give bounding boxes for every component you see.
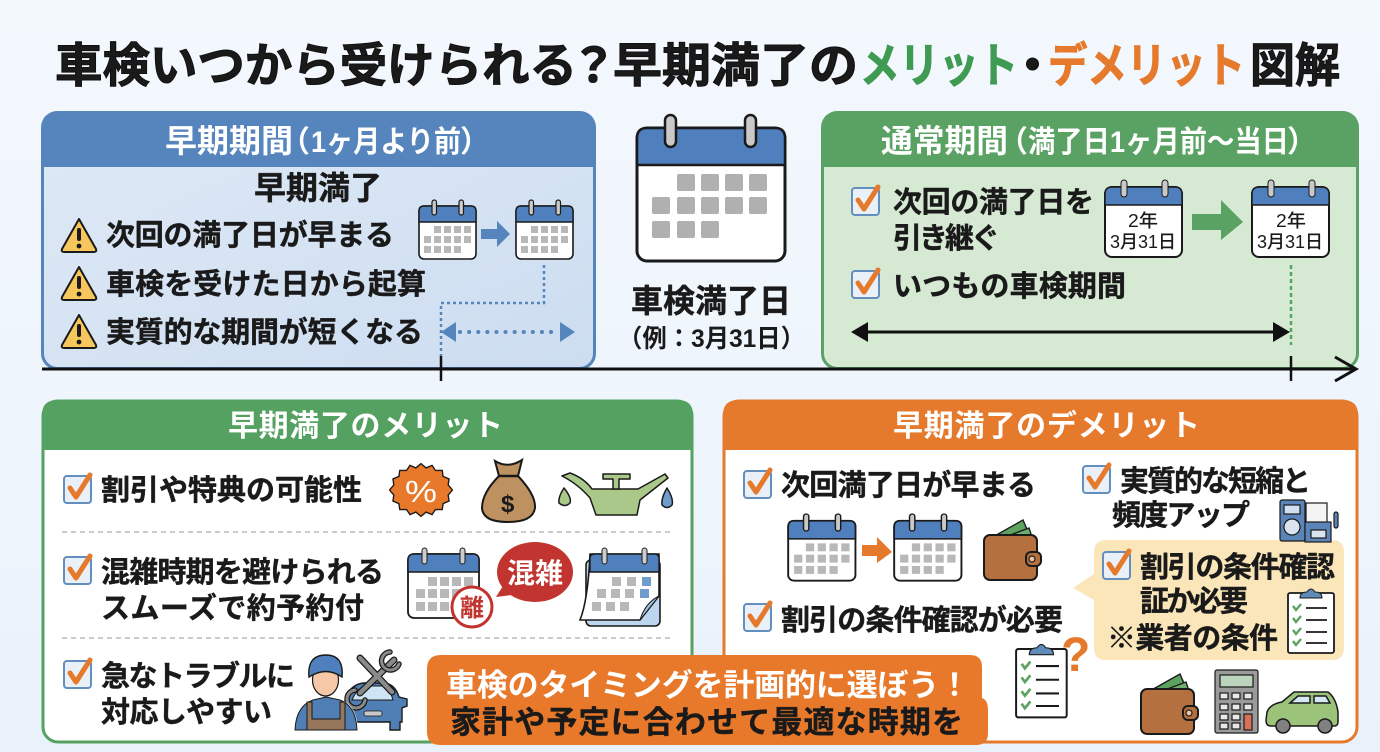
icon: calendar before (419, 200, 476, 259)
checkbox (1083, 465, 1110, 493)
arrow: green (1192, 200, 1243, 240)
dotted connector (441, 265, 544, 356)
callout text: ※業者の条件 (1107, 622, 1278, 655)
icon: main calendar (637, 115, 785, 261)
icon: calendar after (894, 514, 961, 581)
timeline axis (42, 356, 1356, 381)
callout: bottom message: 車検のタイミングを計画的に選ぼう！ (446, 668, 970, 703)
divider (62, 531, 674, 533)
icon: percent badge: % (405, 474, 437, 509)
icon: crowded bubble: 混雑 (507, 558, 563, 589)
icon: calendar with stamp (408, 548, 492, 627)
text: shortening and frequency: 実質的な短縮と (1120, 465, 1311, 498)
checkbox (64, 660, 91, 688)
icon: peeled calendar (580, 548, 660, 626)
title: メリット (860, 39, 1018, 92)
icon: crowded bubble (496, 542, 573, 602)
icon: calendar 3/31 right: 2年 (1276, 211, 1306, 231)
checkbox (744, 470, 771, 498)
text: discounts: 割引や特典の可能性 (101, 474, 362, 507)
heading: normal period: 通常期間 (881, 123, 1008, 159)
heading: early period: 1ヶ月より前 (311, 126, 461, 159)
callout text (1107, 551, 1335, 655)
heading: early period (165, 123, 490, 159)
panel: merits (42, 400, 693, 742)
icon: warning 3 (62, 315, 96, 348)
text: shortening and frequency (1112, 465, 1311, 532)
checkbox (1103, 551, 1130, 579)
text: shortening and frequency: 頻度アップ (1112, 499, 1250, 532)
icon: clipboard with question: ? (1061, 629, 1090, 682)
title: 早期満了の (613, 39, 858, 92)
checkbox 2 (852, 270, 879, 298)
text: inherit expiry date: 引き継ぐ (893, 222, 1000, 255)
text: avoid busy season: スムーズで約予約付 (101, 591, 364, 625)
arrow: shortened span (441, 322, 575, 342)
icon: wallet (984, 520, 1041, 580)
icon: calculator (1215, 670, 1258, 733)
heading: early period: （ (280, 126, 310, 159)
heading: normal period: （ (998, 126, 1028, 159)
checkbox (744, 603, 771, 631)
callout: conditions (1073, 540, 1344, 660)
panel: normal period (822, 112, 1358, 368)
icon: calendar 3/31 left: 2年 (1128, 211, 1158, 231)
title: 車検いつから受けられる (55, 39, 577, 92)
title: デメリット (1048, 39, 1245, 92)
heading: normal period: 満了日1ヶ月前～当日 (1028, 126, 1289, 159)
text: trouble response: 急なトラブルに (101, 659, 295, 693)
callout text: 証か必要 (1140, 585, 1248, 618)
panel: early period (42, 112, 595, 368)
heading: normal period: ） (1287, 126, 1317, 159)
icon: green car (1266, 692, 1338, 733)
icon: percent badge (390, 464, 452, 516)
checkbox 1 (852, 187, 879, 215)
icon: calendar 3/31 left: 3月31日 (1110, 232, 1176, 252)
icon: calendar before (788, 514, 855, 581)
arrow: normal span (851, 322, 1290, 342)
callout text: 割引の条件確認 (1140, 551, 1335, 584)
icon: calendar 3/31 left (1105, 180, 1182, 257)
text: inherit expiry date: 次回の満了日を (893, 186, 1094, 219)
icon: clipboard (1288, 589, 1334, 653)
divider (62, 637, 674, 639)
text: usual period: いつもの車検期間 (893, 270, 1126, 303)
text: trouble response: 対応しやすい (101, 696, 272, 729)
icon: diagnostic machine (1280, 500, 1338, 542)
heading: normal period (881, 123, 1317, 159)
icon: money bag (482, 460, 535, 522)
heading: demerits: 早期満了のデメリット (893, 409, 1200, 443)
callout: bottom message: 家計や予定に合わせて最適な時期を (450, 705, 963, 740)
title: ・ (1009, 39, 1056, 92)
icon: money bag: $ (501, 491, 515, 518)
icon: wallet (1141, 674, 1198, 734)
title (55, 39, 1340, 92)
checkbox (64, 475, 91, 503)
heading: merits: 早期満了のメリット (228, 410, 503, 443)
warning text 3: 実質的な期間が短くなる (106, 315, 423, 349)
callout: bottom message (427, 655, 988, 745)
warning text 1: 次回の満了日が早まる (106, 218, 394, 252)
icon: calendar with stamp: 離 (460, 595, 484, 622)
title: ？ (570, 39, 617, 92)
label: expiry date (618, 283, 805, 353)
title: 図解 (1250, 39, 1340, 92)
arrow: orange (862, 537, 892, 563)
panel: demerits (723, 400, 1358, 742)
arrow: calendar shift (481, 221, 510, 247)
icon: calendar after (516, 200, 573, 259)
text: discount conditions: 割引の条件確認が必要 (781, 603, 1063, 637)
text: earlier expiry: 次回満了日が早まる (781, 468, 1036, 502)
text: trouble response (101, 659, 295, 729)
text: avoid busy season: 混雑時期を避けられる (101, 556, 384, 589)
checkbox (64, 556, 91, 584)
heading: early period: ） (460, 126, 490, 159)
label: expiry date: （例：3月31日） (618, 325, 805, 353)
icon: calendar 3/31 right (1252, 180, 1329, 257)
dashed guide (1290, 265, 1292, 345)
label: expiry date: 車検満了日 (631, 283, 791, 319)
heading: early period: 早期期間 (165, 123, 293, 159)
icon: clipboard with question (1016, 629, 1090, 717)
icon: mechanic and car (295, 652, 407, 730)
subheading: early expiry: 早期満了 (254, 170, 382, 206)
icon: calendar 3/31 right: 3月31日 (1257, 232, 1323, 252)
text: inherit expiry date (893, 186, 1094, 255)
warning text 2: 車検を受けた日から起算 (106, 268, 426, 301)
icon: warning 2 (62, 267, 96, 300)
icon: warning 1 (62, 219, 96, 252)
text: avoid busy season (101, 556, 384, 625)
icon: oil can (559, 473, 672, 515)
